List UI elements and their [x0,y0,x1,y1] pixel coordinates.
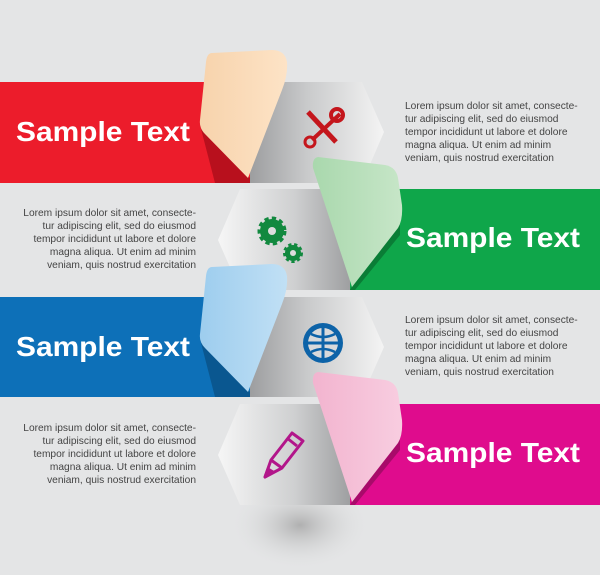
heading: magenta: Sample Text [406,437,580,468]
text block 4: veniam, quis nostrud exercitation [47,475,196,486]
text block 2: magna aliqua. Ut enim ad minim [50,247,196,258]
bottom shadow [230,480,370,570]
text block 2: tur adipiscing elit, sed do eiusmod [43,221,196,232]
text block 1: Lorem ipsum dolor sit amet, consecte- [405,101,578,112]
band: red [0,50,287,183]
band: magenta [313,372,600,505]
text block 1: tempor incididunt ut labore et dolore [405,127,568,138]
heading: green: Sample Text [406,222,580,253]
curl: pink [313,372,402,502]
text block 2: Lorem ipsum dolor sit amet, consecte- [23,208,196,219]
text block 4: magna aliqua. Ut enim ad minim [50,462,196,473]
text block 2: tempor incididunt ut labore et dolore [33,234,196,245]
icon: gears [260,219,301,261]
text block 4: Lorem ipsum dolor sit amet, consecte- [23,423,196,434]
text block 4: tempor incididunt ut labore et dolore [33,449,196,460]
text block 3: Lorem ipsum dolor sit amet, consecte- [405,315,578,326]
icon: tools [305,109,343,147]
curl: light blue [200,264,287,392]
text block 1: tur adipiscing elit, sed do eiusmod [405,114,559,125]
text block 3: magna aliqua. Ut enim ad minim [405,354,551,365]
text block 3: tur adipiscing elit, sed do eiusmod [405,328,559,339]
curl: light green [313,157,402,287]
band: green [313,157,600,290]
heading: blue: Sample Text [16,331,190,362]
plate row 2 [218,189,370,290]
text block 3: veniam, quis nostrud exercitation [405,367,554,378]
text block 2: veniam, quis nostrud exercitation [47,260,196,271]
band: blue [0,264,287,397]
icon: pencil [265,433,303,477]
text block 3: tempor incididunt ut labore et dolore [405,341,568,352]
plate row 3 [230,297,384,397]
text block 1: veniam, quis nostrud exercitation [405,153,554,164]
icon: globe [303,323,343,363]
heading: red: Sample Text [16,116,190,147]
plate row 1 [230,82,384,183]
text block 4: tur adipiscing elit, sed do eiusmod [43,436,196,447]
text block 1: magna aliqua. Ut enim ad minim [405,140,551,151]
plate row 4 [218,404,370,505]
curl: peach [200,50,287,178]
